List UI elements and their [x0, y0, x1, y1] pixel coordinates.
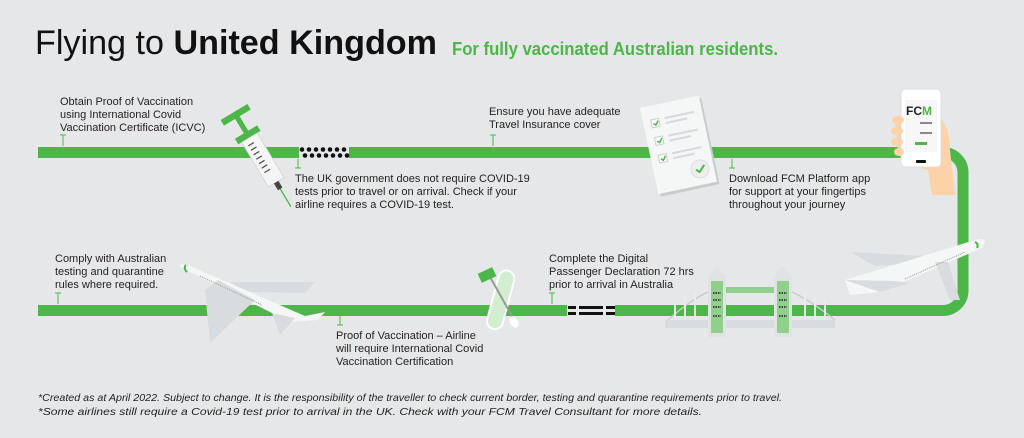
- step 2 text: airline requires a COVID-19 test.: [295, 199, 454, 211]
- step 6 text: [335, 316, 483, 368]
- subtitle: For fully vaccinated Australian residents.: [452, 39, 778, 59]
- dashed segment: [567, 305, 615, 316]
- title: Flying to United Kingdom: [35, 24, 437, 62]
- step 5 text: Complete the Digital: [549, 253, 648, 265]
- route track: [38, 152, 963, 310]
- icon: hand holding phone: FCM: [906, 104, 932, 118]
- icon: syringe: [221, 104, 304, 215]
- icon: airplane right: [845, 239, 985, 300]
- footnotes: *Created as at April 2022. Subject to change. It is the responsibility of the traveller to check current border, testing and quarantine requirements prior to travel.: [38, 392, 782, 404]
- step 7 text: Comply with Australian: [55, 253, 166, 265]
- step 1 text: Vaccination Certificate (ICVC): [60, 122, 205, 134]
- step 4 text: for support at your fingertips: [729, 186, 866, 198]
- step 7 text: rules where required.: [55, 279, 158, 291]
- step 2 text: The UK government does not require COVID-19: [295, 173, 530, 185]
- step 2 text: tests prior to travel or on arrival. Check if your: [295, 186, 517, 198]
- icon: checklist document: [640, 95, 720, 197]
- icon: tower bridge: [665, 266, 835, 337]
- step 4 text: Download FCM Platform app: [729, 173, 870, 185]
- step 7 text: [55, 253, 166, 304]
- footnotes: *Some airlines still require a Covid-19 test prior to arrival in the UK. Check with your FCM Travel Consultant for more details.: [38, 406, 702, 418]
- step 2 text: [295, 159, 530, 211]
- icon: airplane left: [180, 264, 325, 343]
- step 6 text: Vaccination Certification: [336, 356, 453, 368]
- step 1 text: [60, 96, 205, 146]
- icon: hand holding phone: [891, 89, 955, 195]
- step 6 text: Proof of Vaccination – Airline: [336, 330, 476, 342]
- step 3 text: [489, 106, 620, 146]
- step 5 text: prior to arrival in Australia: [549, 279, 674, 291]
- step 6 text: will require International Covid: [335, 343, 483, 355]
- step 3 text: Travel Insurance cover: [489, 119, 601, 131]
- step 5 text: Passenger Declaration 72 hrs: [549, 266, 694, 278]
- step 1 text: using International Covid: [60, 109, 181, 121]
- icon: test tube swab: [478, 267, 520, 331]
- step 1 text: Obtain Proof of Vaccination: [60, 96, 193, 108]
- step 7 text: testing and quarantine: [55, 266, 164, 278]
- step 4 text: [729, 159, 870, 211]
- dotted segment: [299, 147, 349, 158]
- step 4 text: throughout your journey: [729, 199, 846, 211]
- step 5 text: [549, 253, 694, 304]
- footnotes: [38, 392, 782, 418]
- step 3 text: Ensure you have adequate: [489, 106, 620, 118]
